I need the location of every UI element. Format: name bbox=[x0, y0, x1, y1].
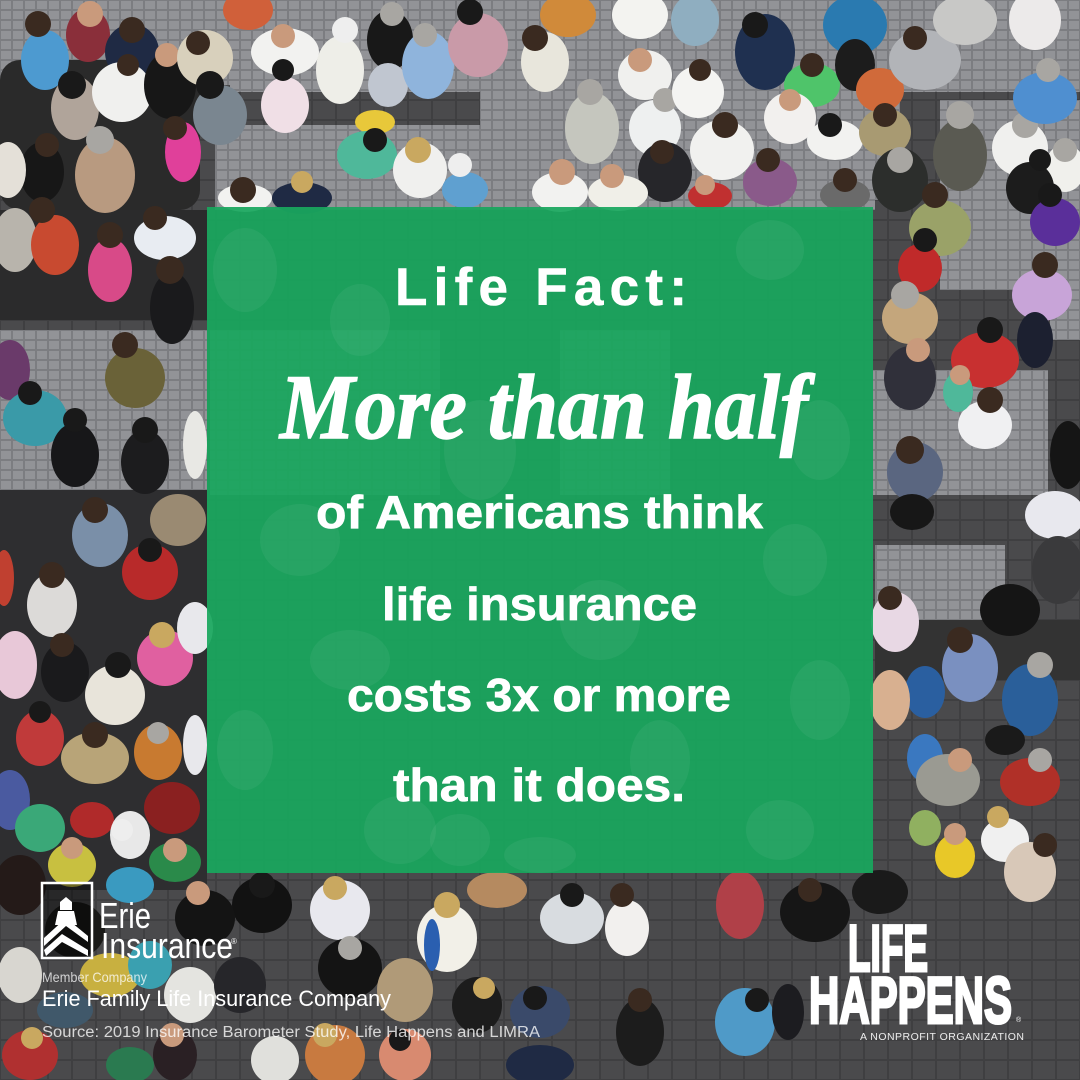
wordmark: Life Happens: LIFE bbox=[848, 911, 928, 985]
panel: green fact box bbox=[207, 207, 873, 873]
body line: life insurance: life insurance bbox=[382, 578, 697, 630]
icon: Erie building bbox=[42, 883, 92, 958]
wordmark: Erie Insurance: Erie bbox=[99, 895, 151, 936]
logo: Life Happens: ® bbox=[1016, 1016, 1022, 1024]
logo: Life Happens: A NONPROFIT ORGANIZATION bbox=[860, 1031, 1024, 1043]
logo: Erie Insurance bbox=[42, 883, 237, 966]
body line: than it does: than it does. bbox=[393, 759, 685, 811]
logo: Erie Insurance: Insurance bbox=[101, 925, 233, 966]
background: light cobblestone patches bbox=[0, 0, 1080, 620]
caption: Member Company: Member Company bbox=[42, 969, 147, 985]
body line: of Americans think: of Americans think bbox=[316, 486, 763, 538]
heading: Life Fact: Life Fact: bbox=[395, 258, 687, 317]
body line: costs 3x or more: costs 3x or more bbox=[347, 669, 731, 721]
logo: Erie Insurance: ® bbox=[231, 937, 237, 946]
source note: Source: 2019 Insurance Barometer Study, Life Happens and LIMRA bbox=[42, 1024, 541, 1041]
faint crowd inside the box bbox=[213, 220, 850, 873]
caption: Erie Family Life Insurance Company: Erie Family Life Insurance Company bbox=[42, 986, 391, 1011]
logo: Life Happens bbox=[809, 911, 1024, 1043]
script headline: More than half: More than half bbox=[278, 356, 816, 458]
